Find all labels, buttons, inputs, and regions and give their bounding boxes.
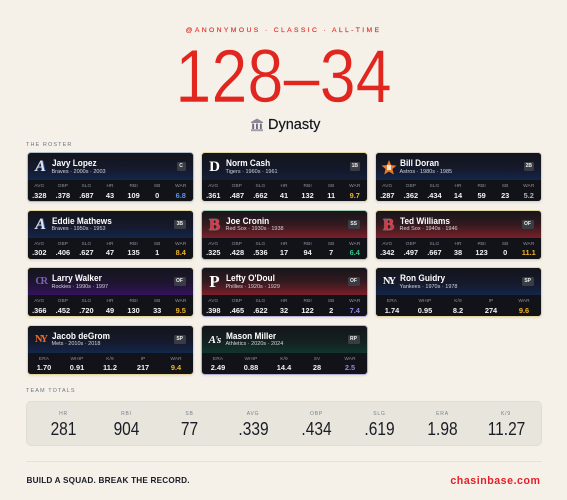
- stat row: [376, 295, 540, 317]
- stat row: 7.4: [350, 306, 360, 314]
- stat row: WAR: [349, 184, 360, 189]
- stat row: SB: [154, 242, 160, 246]
- position badge: OF: [176, 278, 183, 284]
- player name: Joe Cronin: [226, 216, 269, 226]
- stat row: 94: [303, 248, 312, 257]
- position badge: [176, 162, 186, 171]
- stat row: SB: [328, 242, 334, 246]
- stat row: SLG: [255, 184, 265, 189]
- stat row: 2.5: [345, 363, 355, 372]
- stat row: AVG: [382, 184, 392, 189]
- stat row: SLG: [429, 242, 439, 246]
- panel: team totals: [26, 400, 542, 446]
- stat row: 14: [454, 190, 462, 200]
- position badge: SS: [350, 220, 357, 226]
- player card: Norm Cash: [200, 152, 368, 202]
- stat row: OBP: [58, 242, 68, 246]
- stat row: WAR: [349, 299, 360, 304]
- stat row: .720: [79, 306, 94, 314]
- player name: Jacob deGrom: [52, 330, 109, 340]
- stat row: AVG: [34, 184, 44, 189]
- total: AVG: AVG: [247, 410, 259, 416]
- player card: Jacob deGrom: [26, 324, 194, 374]
- stat row: 11.1: [522, 248, 536, 257]
- player name: Ted Williams: [400, 216, 449, 226]
- stat row: OBP: [406, 242, 416, 246]
- stat row: HR: [280, 184, 288, 189]
- stat row: ERA: [387, 299, 397, 304]
- stat row: 17: [280, 248, 288, 257]
- player card: Joe Cronin: [200, 210, 368, 260]
- total: ERA: 1.98: [427, 418, 458, 438]
- player card: Ron Guidry: [374, 267, 542, 317]
- player card: Larry Walker: [26, 267, 194, 317]
- stat row: AVG: [34, 299, 44, 304]
- stat row: 14.4: [277, 363, 291, 372]
- position badge: [348, 277, 360, 286]
- stat row: [202, 238, 366, 260]
- stat row: [202, 295, 366, 317]
- total: K/9: K/9: [501, 410, 511, 416]
- stat row: .342: [380, 248, 394, 257]
- stat row: 33: [153, 306, 161, 314]
- stat row: AVG: [208, 184, 218, 189]
- stat row: 0: [503, 248, 507, 257]
- stat row: 217: [137, 363, 149, 372]
- stat row: .627: [79, 248, 94, 257]
- stat row: HR: [106, 299, 114, 304]
- stat row: 11: [327, 190, 335, 200]
- stat row: [28, 295, 192, 317]
- stat row: .325: [206, 248, 220, 257]
- stat row: SB: [154, 299, 160, 304]
- heading: the roster: THE ROSTER: [26, 142, 72, 148]
- stat row: .434: [427, 190, 442, 200]
- stat row: 38: [454, 248, 462, 257]
- position badge: OF: [524, 220, 531, 226]
- player card: Lefty O'Doul: [200, 267, 368, 317]
- stat row: 135: [127, 248, 140, 257]
- stat row: OBP: [406, 184, 416, 189]
- position badge: [174, 277, 186, 286]
- stat row: 28: [313, 363, 321, 372]
- stat row: 130: [127, 306, 140, 314]
- total: SLG: .619: [364, 418, 395, 438]
- stat row: 0.95: [418, 306, 432, 314]
- stat row: WAR: [523, 184, 534, 189]
- stat row: .487: [230, 190, 244, 200]
- stat row: .366: [32, 306, 46, 314]
- logo: Athletics: A's: [209, 334, 220, 346]
- stat row: 32: [280, 306, 288, 314]
- stat row: .622: [253, 306, 268, 314]
- logo: Astros: [382, 160, 396, 174]
- stat row: [376, 180, 540, 202]
- stat row: [202, 180, 366, 202]
- position badge: 2B: [526, 163, 532, 169]
- position badge: OF: [350, 278, 357, 284]
- stat row: HR: [280, 242, 288, 246]
- logo: Tigers: D: [209, 159, 220, 175]
- stat row: 8.2: [453, 306, 463, 314]
- team and era: Red Sox · 1940s · 1946: [400, 226, 458, 232]
- stat row: 49: [106, 306, 114, 314]
- stat row: .406: [56, 248, 70, 257]
- stat row: SB: [328, 299, 334, 304]
- stat row: SLG: [81, 184, 91, 189]
- stat row: HR: [106, 242, 114, 246]
- stat row: SLG: [429, 184, 439, 189]
- total: RBI: RBI: [121, 410, 132, 416]
- eyebrow: user, mode and era: @ANONYMOUS · CLASSIC · ALL-TIME: [186, 27, 381, 34]
- total: SB: SB: [185, 410, 194, 416]
- stat row: 0.91: [70, 363, 84, 372]
- stat row: 109: [127, 190, 140, 200]
- logo: Rockies: CR: [35, 276, 46, 287]
- stat row: OBP: [58, 299, 68, 304]
- total: HR: HR: [59, 410, 68, 416]
- stat row: WAR: [175, 242, 186, 246]
- stat row: .497: [404, 248, 418, 257]
- total: SB: 77: [181, 418, 198, 438]
- stat row: WHIP: [419, 299, 431, 304]
- stat row: SLG: [255, 299, 265, 304]
- stat row: 9.6: [519, 306, 529, 314]
- total: K/9: 11.27: [487, 418, 525, 438]
- stat row: .687: [79, 190, 94, 200]
- stat row: .378: [56, 190, 70, 200]
- tier label: Dynasty: [251, 117, 320, 133]
- stat row: .428: [230, 248, 244, 257]
- stat row: .452: [56, 306, 70, 314]
- position badge: [522, 220, 534, 228]
- stat row: 9.7: [350, 190, 360, 200]
- stat row: WAR: [349, 242, 360, 246]
- team and era: Rockies · 1990s · 1997: [52, 284, 108, 290]
- stat row: WAR: [175, 299, 186, 304]
- stat row: 0.88: [244, 363, 258, 372]
- stat row: SB: [154, 184, 160, 189]
- stat row: RBI: [303, 242, 312, 246]
- stat row: .302: [32, 248, 46, 257]
- stat row: 7: [329, 248, 333, 257]
- stat row: WAR: [523, 242, 534, 246]
- stat row: 41: [280, 190, 288, 200]
- team and era: Braves · 1950s · 1953: [52, 226, 106, 232]
- stat row: 132: [301, 190, 314, 200]
- stat row: WAR: [175, 184, 186, 189]
- stat row: IP: [141, 356, 145, 362]
- stat row: HR: [280, 299, 288, 304]
- player name: Javy Lopez: [52, 158, 96, 168]
- player card: Eddie Mathews: [26, 210, 194, 260]
- team and era: Yankees · 1970s · 1978: [400, 284, 458, 290]
- position badge: C: [179, 163, 183, 169]
- stat row: .667: [427, 248, 442, 257]
- player card: Mason Miller: [200, 324, 368, 374]
- stat row: OBP: [232, 299, 242, 304]
- stat row: [28, 180, 192, 202]
- team and era: Braves · 2000s · 2003: [52, 168, 106, 174]
- stat row: SB: [328, 184, 334, 189]
- stat row: SLG: [81, 242, 91, 246]
- position badge: [174, 220, 186, 228]
- stat row: 122: [301, 306, 314, 314]
- stat row: [376, 238, 540, 260]
- stat row: RBI: [477, 184, 486, 189]
- stat row: WHIP: [71, 356, 83, 362]
- stat row: IP: [489, 299, 493, 304]
- stat row: AVG: [208, 242, 218, 246]
- team and era: Red Sox · 1930s · 1938: [226, 226, 284, 232]
- position badge: RP: [350, 336, 357, 342]
- player name: Ron Guidry: [400, 273, 445, 283]
- stat row: HR: [454, 242, 462, 246]
- stat row: RBI: [129, 299, 138, 304]
- stat row: HR: [454, 184, 462, 189]
- position badge: [174, 334, 186, 344]
- stat row: 2.49: [211, 363, 225, 372]
- stat row: RBI: [303, 299, 312, 304]
- stat row: 9.4: [171, 363, 181, 372]
- player name: Larry Walker: [52, 273, 101, 283]
- stat row: K/9: [106, 356, 114, 362]
- logo: Red Sox: B: [209, 214, 220, 234]
- stat row: 5.2: [524, 190, 534, 200]
- stat row: 59: [477, 190, 486, 200]
- position badge: [348, 334, 360, 344]
- position badge: [348, 220, 360, 228]
- title: team record: 128–34: [175, 34, 392, 118]
- player card: Bill Doran: [374, 152, 542, 202]
- stat row: RBI: [129, 184, 138, 189]
- total: SLG: SLG: [373, 410, 386, 416]
- stat row: K/9: [454, 299, 462, 304]
- team and era: Athletics · 2020s · 2024: [226, 341, 283, 347]
- player name: Bill Doran: [400, 158, 439, 168]
- website link: chasinbase.com: [450, 475, 540, 487]
- stat row: .536: [253, 248, 268, 257]
- stat row: 8.4: [176, 248, 186, 257]
- position badge: 3B: [177, 220, 183, 226]
- position badge: [350, 162, 360, 171]
- tier name: Dynasty: [268, 117, 320, 133]
- team and era: Mets · 2010s · 2018: [52, 341, 100, 347]
- stat row: AVG: [208, 299, 218, 304]
- stat row: ERA: [39, 356, 49, 362]
- total: RBI: 904: [114, 418, 139, 438]
- stat row: [28, 352, 192, 374]
- team and era: Phillies · 1920s · 1929: [226, 284, 280, 290]
- stat row: 11.2: [103, 363, 117, 372]
- heading: team totals: TEAM TOTALS: [26, 388, 76, 394]
- stat row: 6.4: [350, 248, 360, 257]
- stat row: 6.8: [176, 190, 186, 200]
- stat row: 43: [106, 190, 114, 200]
- stat row: 0: [155, 190, 159, 200]
- total: AVG: .339: [238, 418, 268, 438]
- stat row: 274: [485, 306, 497, 314]
- stat row: .465: [230, 306, 244, 314]
- stat row: SLG: [81, 299, 91, 304]
- stat row: .362: [404, 190, 418, 200]
- stat row: K/9: [280, 356, 288, 362]
- stat row: 1.70: [37, 363, 51, 372]
- stat row: SB: [502, 184, 508, 189]
- position badge: [524, 162, 534, 171]
- logo: Red Sox: B: [383, 214, 394, 234]
- player name: Mason Miller: [226, 330, 276, 340]
- logo: Phillies: P: [209, 272, 220, 291]
- logo: Braves: A: [35, 158, 46, 175]
- stat row: .361: [206, 190, 220, 200]
- stat row: OBP: [232, 184, 242, 189]
- player name: Norm Cash: [226, 158, 270, 168]
- total: ERA: ERA: [436, 410, 449, 416]
- total: OBP: OBP: [310, 410, 323, 416]
- stat row: 9.5: [176, 306, 186, 314]
- tagline: BUILD A SQUAD. BREAK THE RECORD.: [26, 476, 190, 485]
- stat row: WHIP: [245, 356, 257, 362]
- player name: Lefty O'Doul: [226, 273, 274, 283]
- stat row: OBP: [232, 242, 242, 246]
- logo: Mets: NY: [35, 334, 46, 344]
- stat row: 2: [329, 306, 333, 314]
- player name: Eddie Mathews: [52, 216, 111, 226]
- total: HR: 281: [51, 418, 76, 438]
- stat row: RBI: [477, 242, 486, 246]
- stat row: .287: [380, 190, 394, 200]
- stat row: SLG: [255, 242, 265, 246]
- stat row: HR: [106, 184, 114, 189]
- logo: Braves: A: [35, 216, 46, 232]
- stat row: WAR: [518, 299, 530, 304]
- stat row: .328: [32, 190, 46, 200]
- stat row: .398: [206, 306, 220, 314]
- stat row: AVG: [34, 242, 44, 246]
- logo: Yankees: NY: [383, 276, 394, 287]
- stat row: SV: [314, 356, 320, 362]
- stat row: .662: [253, 190, 268, 200]
- stat row: [28, 238, 192, 260]
- stat row: RBI: [303, 184, 312, 189]
- stat row: AVG: [382, 242, 392, 246]
- stat row: ERA: [213, 356, 223, 362]
- player card: Javy Lopez: [26, 152, 194, 202]
- stat row: 23: [501, 190, 509, 200]
- stat row: 1: [155, 248, 159, 257]
- team and era: Astros · 1980s · 1985: [400, 168, 452, 174]
- position badge: SP: [524, 278, 531, 284]
- position badge: 1B: [352, 163, 358, 169]
- stat row: [202, 352, 366, 374]
- stat row: WAR: [344, 356, 356, 362]
- stat row: 47: [106, 248, 114, 257]
- team and era: Tigers · 1960s · 1961: [226, 168, 278, 174]
- position badge: SP: [176, 336, 183, 342]
- stat row: RBI: [129, 242, 138, 246]
- position badge: [522, 277, 534, 286]
- icon: classical building: [251, 118, 263, 132]
- stat row: 123: [475, 248, 488, 257]
- stat row: WAR: [170, 356, 182, 362]
- player card: Ted Williams: [374, 210, 542, 260]
- stat row: 1.74: [385, 306, 399, 314]
- stat row: SB: [502, 242, 508, 246]
- stat row: OBP: [58, 184, 68, 189]
- total: OBP: .434: [301, 418, 332, 438]
